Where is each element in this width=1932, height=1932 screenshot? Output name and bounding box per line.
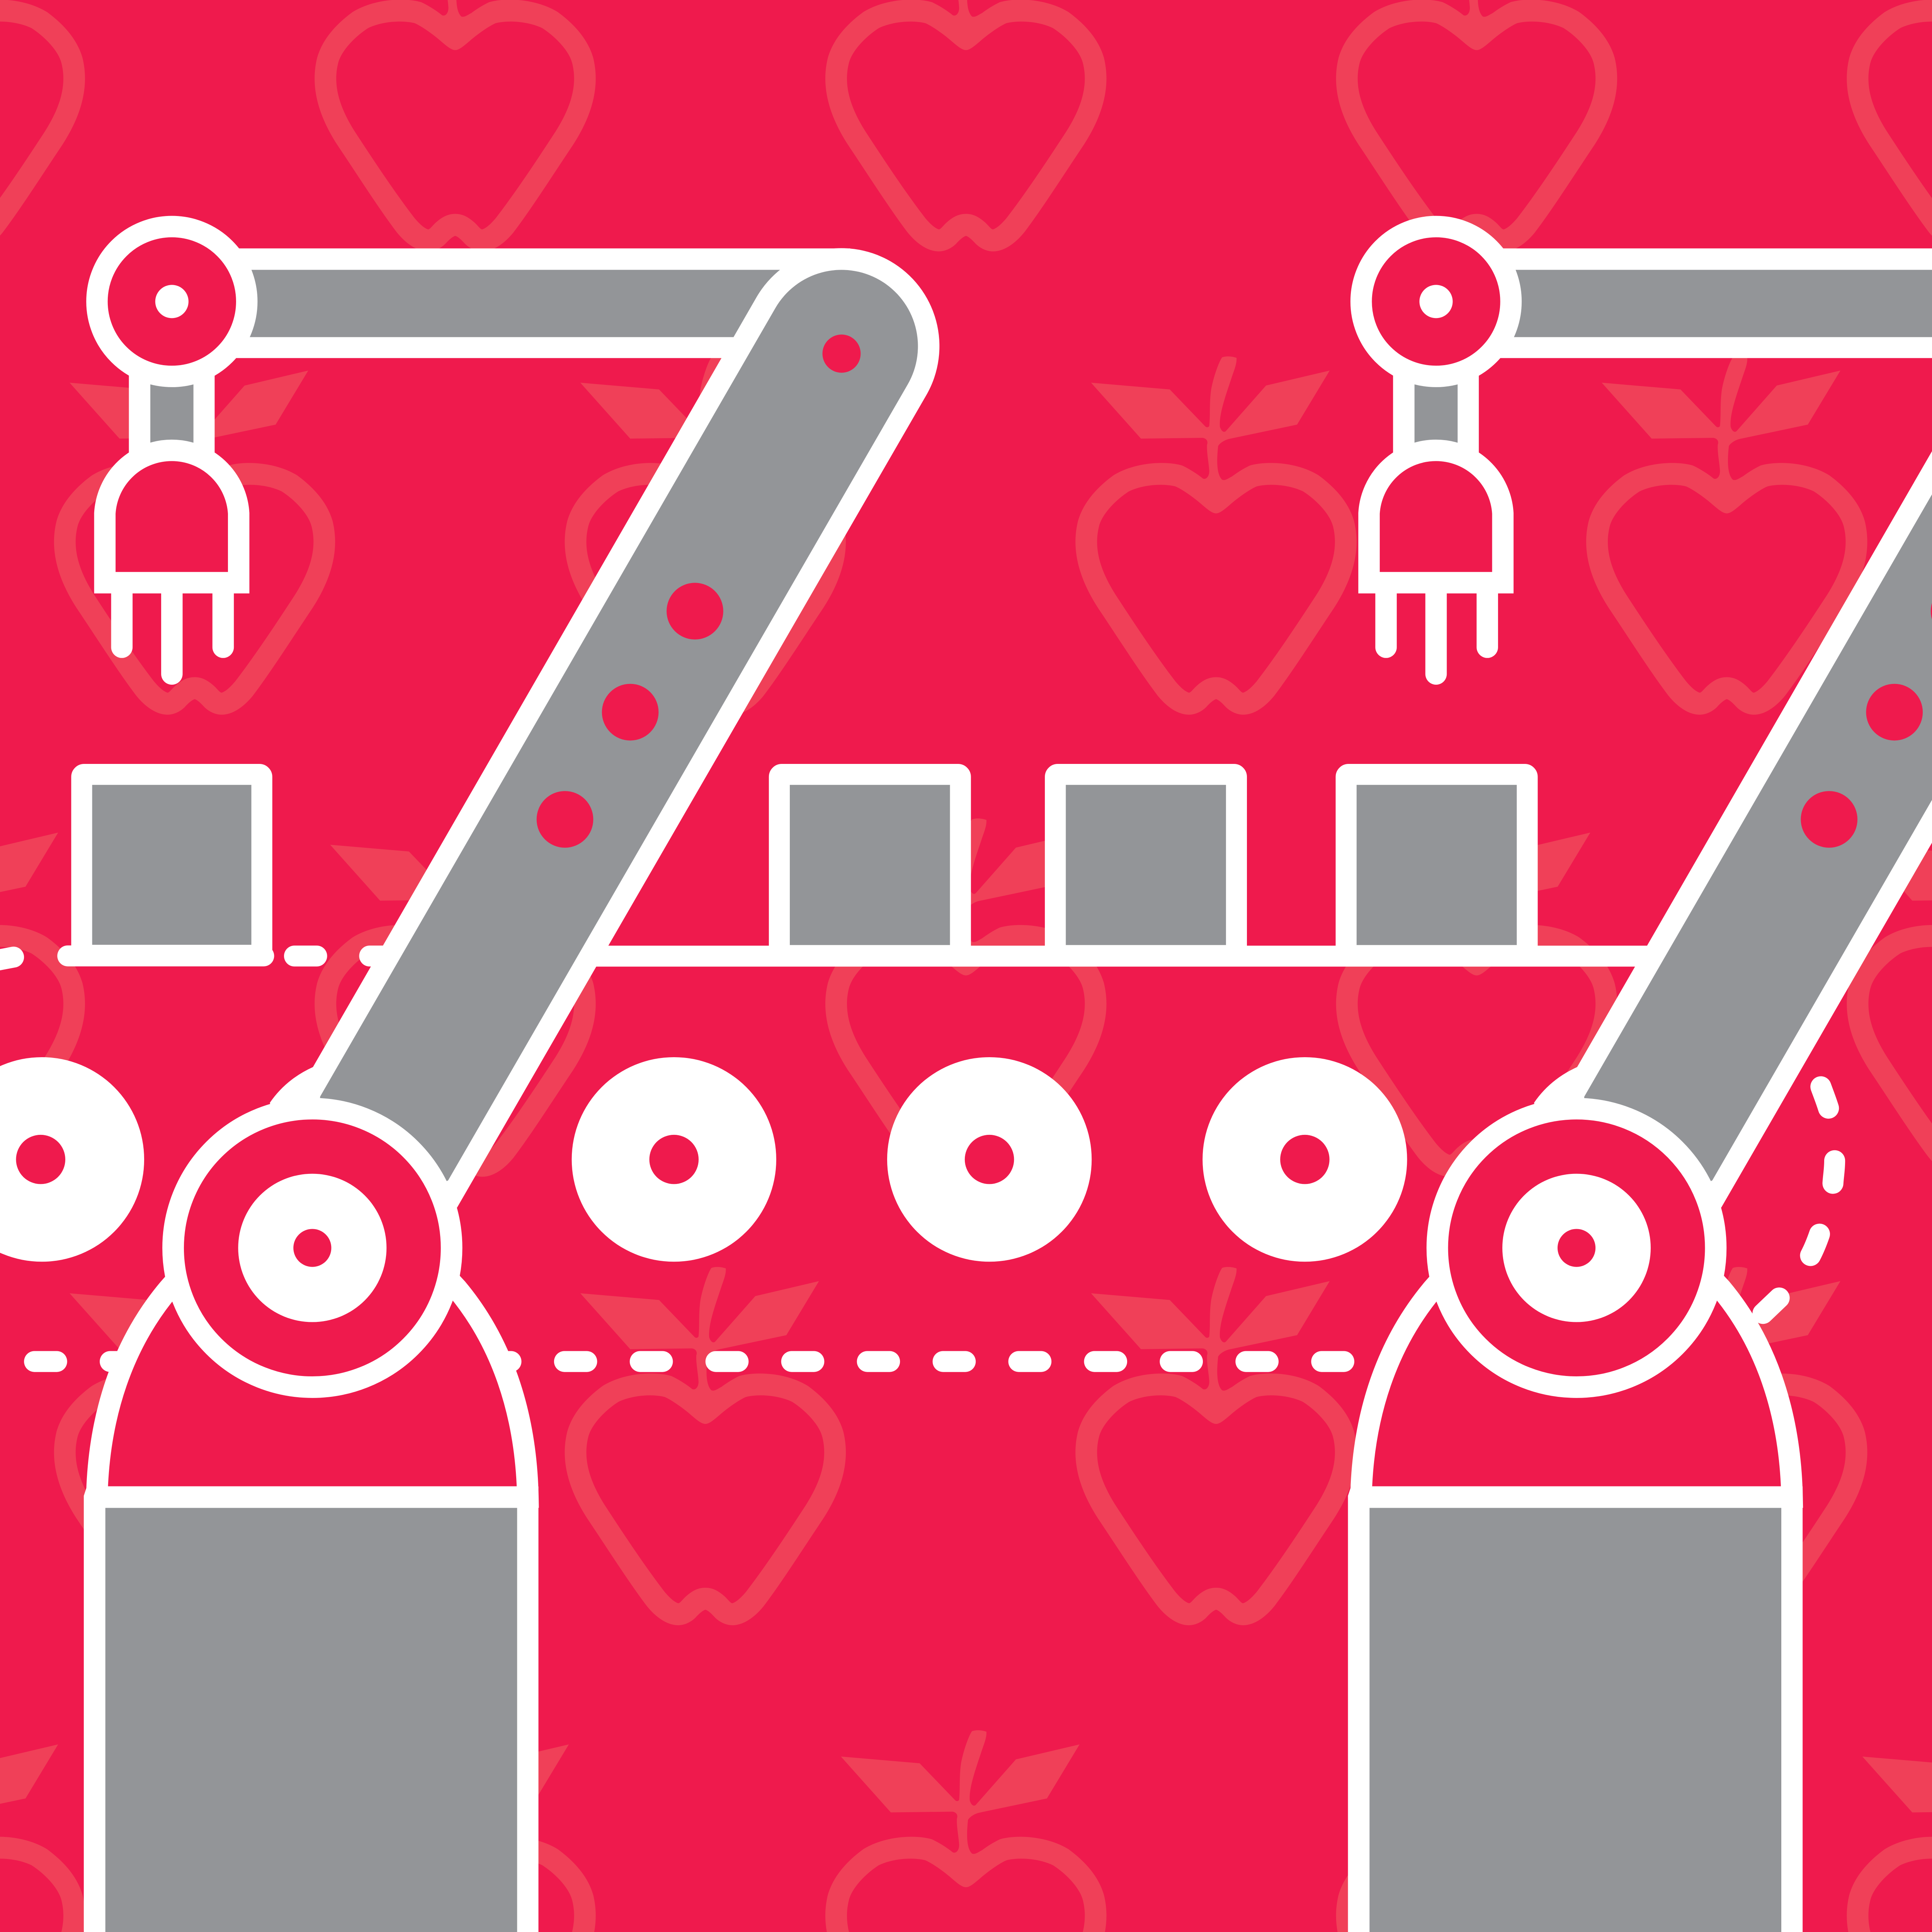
apple row 4 [54,1267,1867,1625]
solid belt [592,946,1657,967]
belt dashes [0,956,394,961]
box 2 [779,774,961,956]
lower dashed line [34,1358,1345,1365]
curved dashes at right [1763,1087,1835,1313]
wheel 2 [572,1057,776,1262]
conveyor wheels [0,1057,1407,1262]
wheel 4 [1202,1057,1407,1262]
apple row 5 [0,1730,1932,1932]
robot arm 1 base and joint [84,1109,538,1932]
apple row 1 [0,0,1932,252]
robot arm 2 horizontal bar and plug gripper [1361,226,1932,674]
box 4 [1346,774,1527,956]
conveyor belt [0,946,1657,967]
robot arm 2 long segment [1534,248,1932,1248]
wheel 3 [887,1057,1092,1262]
box 3 [1055,774,1236,956]
apple row 2 [54,356,1867,715]
apple row 3 [0,818,1932,1177]
robot arm 1 long segment [270,248,939,1248]
robot arm 1 horizontal bar and plug gripper [97,226,850,674]
robot arm 2 base and joint [1348,1109,1803,1932]
box 1 [82,774,262,955]
wheel 1 [0,1057,144,1262]
